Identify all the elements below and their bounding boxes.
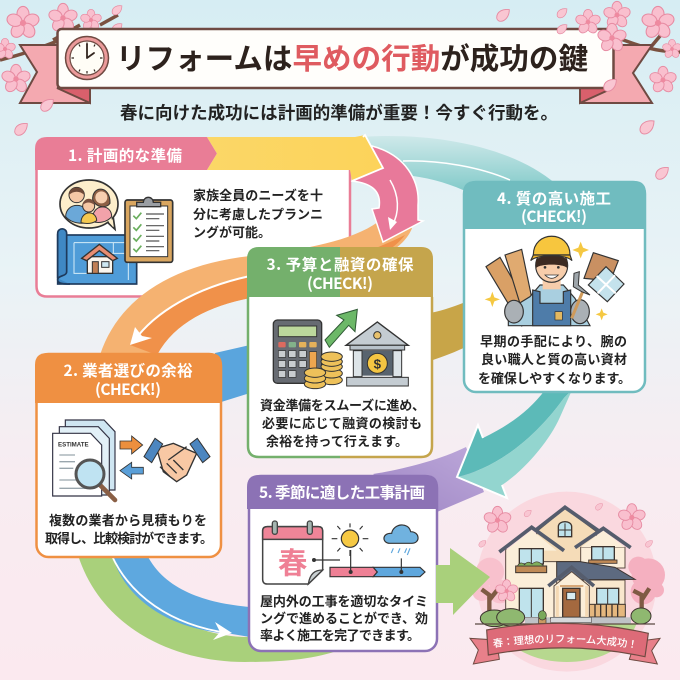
title text: リフォームは早めの行動が成功の鍵 (116, 42, 588, 76)
branches and blossoms: top left (0, 3, 122, 94)
title banner (58, 29, 614, 88)
icon: estimate, arrows, handshake: ESTIMATE (58, 442, 89, 449)
heading: 2. 業者選びの余裕 (64, 359, 193, 381)
heading: 3. 予算と融資の確保 (266, 253, 414, 275)
check label: (CHECK!) (521, 205, 587, 227)
text block: 複数の業者から見積もりを (49, 513, 207, 528)
falling petals (15, 9, 668, 179)
icon: family, clipboard, blueprint (58, 180, 173, 284)
arrow: blue band from step 3 to step 2 (215, 345, 250, 403)
heading: 5. 季節に適した工事計画 (259, 481, 425, 503)
text block: 早期の手配により、腕の (480, 334, 627, 349)
text block: 率よく施工を完了できます。 (260, 628, 420, 643)
arrow: yellow header extension (207, 135, 383, 181)
text block (45, 513, 213, 546)
text block: 屋内外の工事を適切なタイミ (260, 594, 428, 609)
icon: clock (66, 36, 108, 80)
text block: 分に考慮したプランニ (193, 207, 323, 222)
heading: 1. 計画的な準備 (68, 144, 182, 166)
title ribbon: right tail (580, 45, 652, 103)
check label: (CHECK!) (95, 378, 161, 400)
text block: 取得し、比較検討ができます。 (45, 531, 213, 546)
arrow: pink curved from step 1 (352, 146, 423, 242)
arrow: green sweep to house (78, 555, 438, 662)
icon: estimate, arrows, handshake (53, 420, 210, 500)
text block: 良い職人と質の高い資材 (481, 352, 627, 367)
text block (260, 594, 428, 643)
arrow: orange band from step 1 side to step 2 (100, 222, 412, 355)
panel: step 3 budget and financing (247, 247, 433, 457)
icon: worker with materials (485, 236, 624, 326)
banner: success ribbon (469, 622, 661, 665)
panel: step 4 quality construction (463, 181, 646, 392)
icon: calculator, coins, bank (273, 309, 408, 389)
banner: success ribbon: 春：理想のリフォーム大成功！ (493, 634, 634, 648)
arrow: gold band from step 3 to step 4 (430, 301, 468, 361)
panel: step 2 contractor selection (35, 353, 222, 557)
panel: step 5 seasonal schedule (247, 475, 438, 651)
text block: ングが可能。 (193, 225, 271, 240)
illustration: dream house with blossoms (469, 492, 665, 672)
arrow: teal top band from step 3 to step 4 (360, 136, 556, 190)
arrow: blue sweep to step 5 (112, 555, 250, 640)
title ribbon: left tail (20, 45, 90, 103)
panel: step 1 planning (35, 137, 350, 297)
subtitle: 春に向けた成功には計画的準備が重要！今すぐ行動を。 (120, 103, 558, 123)
text block: 必要に応じて融資の検討も (262, 416, 422, 431)
text block (260, 398, 425, 449)
icon: spring calendar (263, 521, 340, 584)
icon: calculator, coins, bank: $ (374, 356, 382, 371)
text block: 資金準備をスムーズに進め、 (260, 398, 425, 413)
text block: 家族全員のニーズを十 (193, 188, 323, 203)
icon: weather and timeline (330, 523, 425, 577)
text block: を確保しやすくなります。 (478, 371, 631, 386)
branches and blossoms: top right (610, 30, 680, 52)
text block (478, 334, 631, 386)
arrow: green head pointing at house (436, 548, 490, 615)
arrow: purple band to step 5 (373, 447, 484, 512)
text block (193, 188, 323, 240)
check label: (CHECK!) (307, 272, 373, 294)
text block: ングで進めることができ、効 (260, 611, 428, 626)
blossoms over banner right (557, 1, 680, 94)
text block: 余裕を持って行えます。 (266, 434, 408, 449)
heading: 4. 質の高い施工 (497, 187, 611, 209)
icon: spring calendar: 春 (278, 547, 307, 580)
arrow: teal band down from step 4 (457, 390, 572, 498)
